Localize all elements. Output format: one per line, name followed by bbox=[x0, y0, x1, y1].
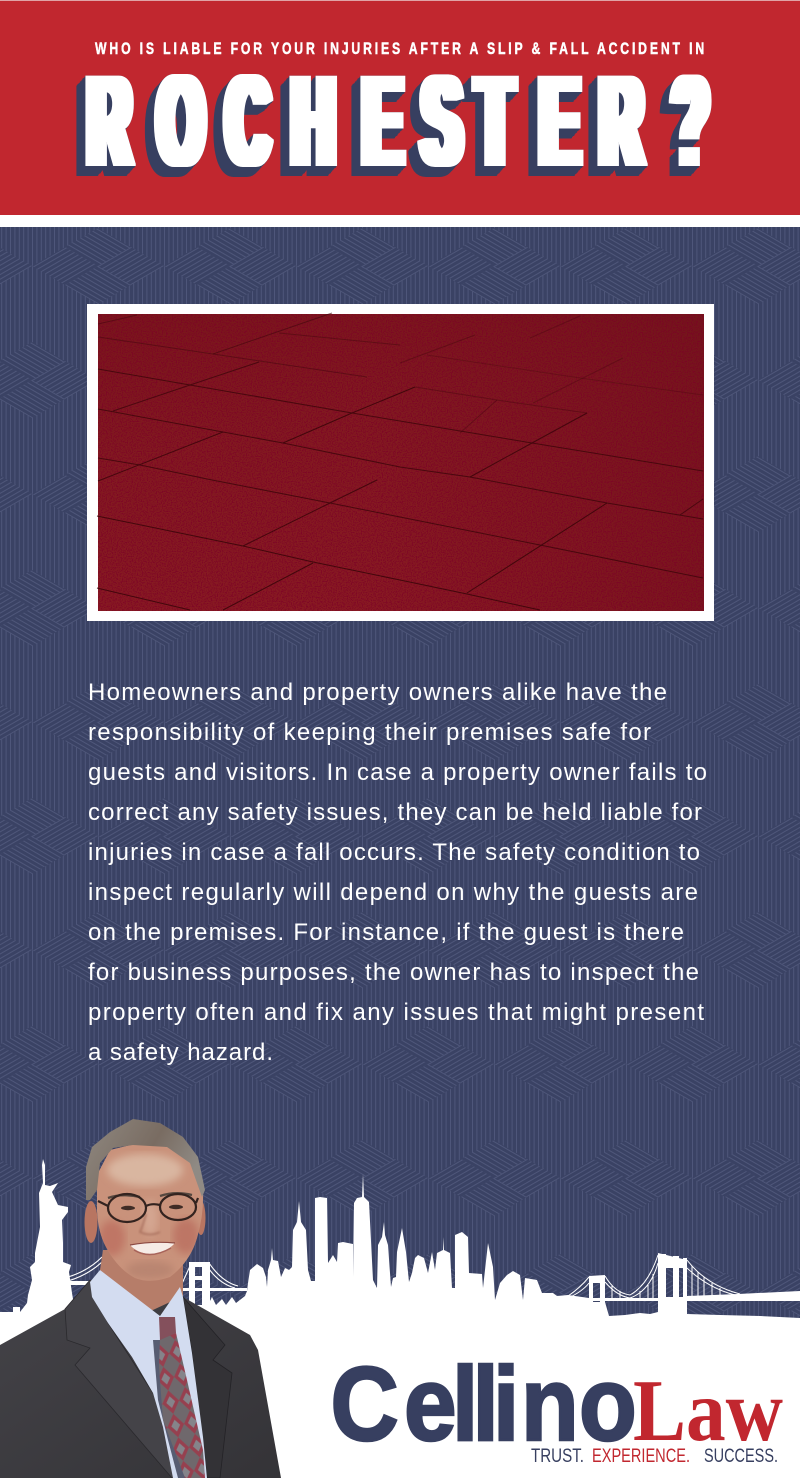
wordmark: Law: Law bbox=[633, 1363, 783, 1460]
body paragraph: on the premises. For instance, if the guest is there bbox=[88, 919, 684, 946]
body paragraph: property often and fix any issues that might present bbox=[88, 999, 704, 1026]
eyebrows and eyes bbox=[108, 1193, 192, 1210]
header banner bbox=[0, 0, 800, 227]
left bridge bbox=[68, 1257, 247, 1307]
smile bbox=[130, 1242, 175, 1255]
body paragraph: injuries in case a fall occurs. The safety condition to bbox=[88, 839, 700, 866]
title: ROCHESTER? bbox=[88, 51, 708, 193]
body paragraph: for business purposes, the owner has to inspect the bbox=[88, 959, 699, 986]
neck bbox=[100, 1250, 183, 1316]
tie bbox=[159, 1333, 205, 1478]
skyline buildings and statue bbox=[0, 1159, 800, 1478]
tagline: TRUST. bbox=[531, 1446, 584, 1467]
hair bbox=[86, 1119, 205, 1200]
nose bbox=[140, 1214, 160, 1234]
glasses bbox=[98, 1194, 198, 1222]
subtitle: WHO IS LIABLE FOR YOUR INJURIES AFTER A SLIP & FALL ACCIDENT IN bbox=[95, 40, 704, 59]
tagline: SUCCESS. bbox=[704, 1446, 778, 1467]
suit bbox=[0, 1280, 281, 1478]
body paragraph: Homeowners and property owners alike have the bbox=[88, 679, 667, 706]
tagline bbox=[531, 1446, 778, 1467]
ears bbox=[84, 1201, 98, 1243]
Cellino Law logo bbox=[330, 1346, 783, 1467]
tagline: EXPERIENCE. bbox=[592, 1446, 690, 1467]
left lapel bbox=[65, 1280, 190, 1478]
right lapel bbox=[183, 1297, 232, 1478]
right bridges bbox=[568, 1253, 800, 1316]
body paragraph: correct any safety issues, they can be held liable for bbox=[88, 799, 702, 826]
body paragraph: guests and visitors. In case a property owner fails to bbox=[88, 759, 707, 786]
body paragraph: a safety hazard. bbox=[88, 1039, 273, 1066]
face bbox=[96, 1145, 204, 1281]
body paragraph bbox=[88, 679, 707, 1066]
body paragraph: inspect regularly will depend on why the guests are bbox=[88, 879, 698, 906]
wordmark: Cellino: Cellino bbox=[330, 1346, 637, 1463]
New York skyline silhouette bbox=[0, 1159, 800, 1478]
shirt bbox=[90, 1270, 207, 1478]
body paragraph: responsibility of keeping their premises safe for bbox=[88, 719, 651, 746]
photo: red paved floor in white frame bbox=[87, 304, 714, 621]
portrait: attorney in suit and glasses bbox=[0, 1119, 281, 1478]
